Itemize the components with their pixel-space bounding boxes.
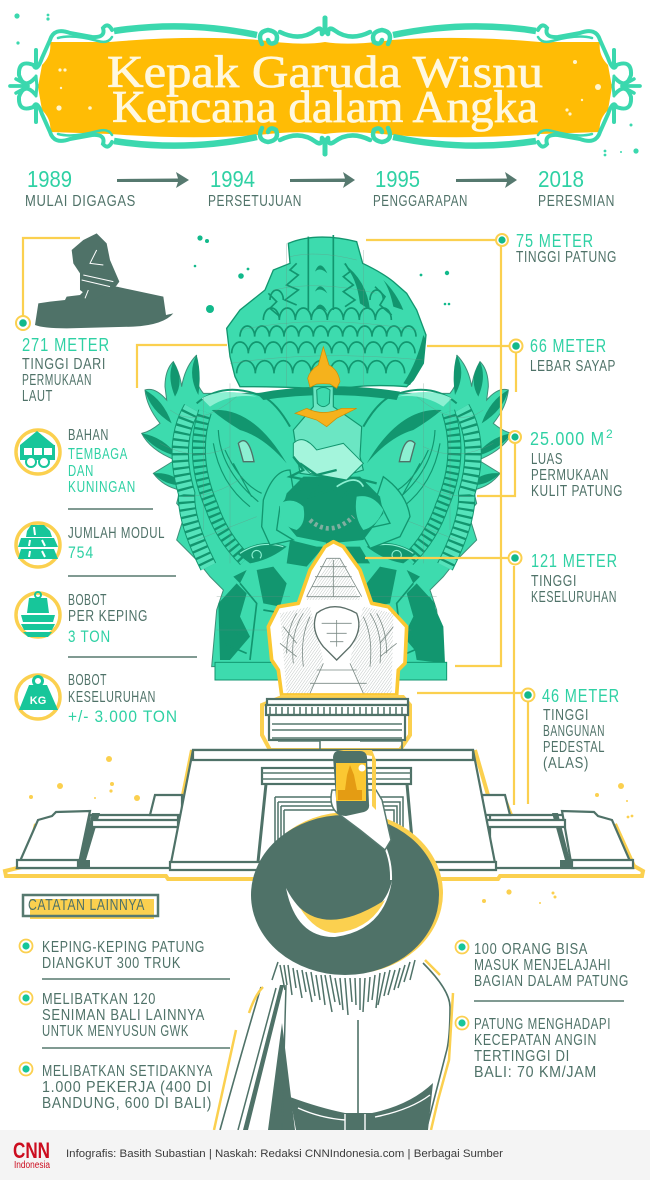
callout: 66 meter: 66 METER bbox=[530, 336, 607, 356]
stat: bahan: KUNINGAN bbox=[68, 479, 136, 496]
stat: bobot keseluruhan: +/- 3.000 TON bbox=[68, 707, 178, 726]
arrow 2 bbox=[290, 172, 355, 188]
CNN logo: Indonesia bbox=[14, 1160, 50, 1171]
divider bbox=[68, 575, 176, 577]
note: melibatkan 120 bbox=[20, 991, 205, 1040]
footer bbox=[0, 1130, 650, 1180]
banner frame ornament bbox=[10, 18, 640, 154]
hair bbox=[272, 960, 415, 1015]
callout: 46 meter bbox=[522, 686, 620, 772]
2018 milestone: PERESMIAN bbox=[538, 193, 615, 210]
marker bbox=[496, 234, 508, 246]
icon: KG weight bbox=[16, 675, 60, 719]
note: angin bbox=[456, 1016, 611, 1081]
1989 milestone: MULAI DIGAGAS bbox=[25, 193, 136, 210]
callout: 25.000 m2: 25.000 M bbox=[530, 429, 605, 449]
callout: 25.000 m2: LUAS bbox=[531, 451, 563, 468]
left wing bbox=[142, 355, 327, 667]
1994 milestone: 1994 bbox=[210, 166, 255, 192]
stat: bobot per keping: 3 TON bbox=[68, 627, 111, 646]
stat: bahan bbox=[16, 427, 136, 496]
note: 100 orang: 100 ORANG BISA bbox=[474, 941, 588, 958]
callout: 271 meter with island silhouette: LAUT bbox=[22, 388, 53, 405]
crown of feathers bbox=[227, 235, 426, 400]
note: melibatkan setidaknya: 1.000 PEKERJA (400 DI bbox=[42, 1079, 212, 1096]
divider bbox=[42, 1047, 230, 1049]
callout: 25.000 m2: PERMUKAAN bbox=[531, 467, 609, 484]
1995 milestone: PENGGARAPAN bbox=[373, 193, 468, 210]
CNN logo: CNN bbox=[13, 1138, 50, 1163]
callout: 75 meter: TINGGI PATUNG bbox=[516, 249, 617, 266]
callout: 46 meter: BANGUNAN bbox=[543, 723, 605, 740]
callout: 46 meter: 46 METER bbox=[542, 686, 620, 706]
bullet bbox=[20, 992, 32, 1004]
stat: bobot keseluruhan: BOBOT bbox=[68, 672, 107, 689]
pedestal main building bbox=[5, 750, 643, 879]
heading: catatan lainnya bbox=[23, 895, 158, 919]
callout: 25.000 m2 bbox=[509, 427, 623, 500]
CNN logo bbox=[13, 1138, 50, 1171]
callout: 75 meter: 75 METER bbox=[516, 231, 594, 251]
right wing bbox=[327, 355, 512, 667]
pedestal upper tier bbox=[262, 697, 410, 750]
wing feather row inner bbox=[199, 412, 245, 560]
bullet bbox=[456, 940, 468, 954]
yellow specks bbox=[29, 756, 633, 904]
callout: 121 meter: TINGGI bbox=[531, 573, 577, 590]
divider bbox=[68, 508, 153, 510]
note: melibatkan 120: MELIBATKAN 120 bbox=[42, 991, 156, 1008]
callout: 46 meter: (ALAS) bbox=[543, 755, 589, 772]
note: melibatkan setidaknya: BANDUNG, 600 DI BALI) bbox=[42, 1095, 212, 1112]
1989 milestone: 1989 bbox=[27, 166, 72, 192]
icon: KG weight: KG bbox=[30, 695, 46, 707]
note: keping-keping patung bbox=[20, 939, 205, 972]
banner orange panel bbox=[38, 38, 612, 137]
stat: jumlah modul bbox=[16, 523, 165, 567]
stat: bobot per keping: BOBOT bbox=[68, 592, 107, 609]
yellow shadow bbox=[5, 750, 643, 879]
dark tangle below Vishnu bbox=[290, 457, 377, 497]
icon: wagon bbox=[16, 430, 60, 474]
marker bbox=[522, 688, 534, 702]
timeline bbox=[25, 166, 615, 210]
divider bbox=[474, 1000, 624, 1002]
right wing block bbox=[490, 815, 575, 868]
title line 1: Kepak Garuda Wisnu bbox=[107, 47, 543, 97]
stat: bobot keseluruhan: KESELURUHAN bbox=[68, 689, 156, 706]
callout: 66 meter: LEBAR SAYAP bbox=[530, 358, 616, 375]
note: melibatkan 120: SENIMAN BALI LAINNYA bbox=[42, 1007, 205, 1024]
marker bbox=[508, 552, 522, 564]
note: melibatkan setidaknya: MELIBATKAN SETIDAKNYA bbox=[42, 1063, 213, 1080]
left wing block bbox=[80, 815, 178, 868]
bullet bbox=[20, 1062, 32, 1076]
marker bbox=[509, 431, 521, 443]
Vishnu figure bbox=[262, 347, 445, 663]
note: melibatkan setidaknya bbox=[20, 1062, 213, 1112]
1995 milestone bbox=[373, 166, 468, 210]
stat: bahan: TEMBAGA bbox=[68, 446, 128, 463]
divider bbox=[42, 978, 230, 980]
gold collar bbox=[295, 408, 357, 427]
stat: bahan: DAN bbox=[68, 463, 94, 480]
Garuda belly bbox=[280, 477, 383, 543]
credits: Infografis: Basith Subastian | Naskah: Redaksi CNNIndonesia.com | Berbagai Sumber bbox=[66, 1148, 503, 1160]
heading: catatan lainnya: CATATAN LAINNYA bbox=[28, 897, 145, 914]
callout: 75 meter bbox=[496, 231, 617, 266]
statue Garuda Wisnu Kencana bbox=[142, 235, 512, 695]
Vishnu body bbox=[293, 387, 363, 478]
note: angin: TERTINGGI DI bbox=[474, 1048, 570, 1065]
bullet bbox=[456, 1016, 468, 1030]
hat crescent bbox=[286, 880, 392, 937]
stat: bobot per keping bbox=[16, 592, 148, 646]
callout: 46 meter: PEDESTAL bbox=[543, 739, 605, 756]
note: keping-keping patung: DIANGKUT 300 TRUK bbox=[42, 955, 181, 972]
hat yellow edge bbox=[255, 812, 443, 974]
wing feather row outer bbox=[180, 408, 208, 567]
island silhouette bbox=[35, 233, 173, 328]
1989 milestone bbox=[25, 166, 136, 210]
body outline bbox=[220, 963, 450, 1130]
callout: 271 meter with island silhouette: PERMUKAAN bbox=[22, 372, 92, 389]
1994 milestone bbox=[208, 166, 302, 210]
title banner bbox=[10, 13, 640, 156]
teal specks near statue bbox=[194, 235, 450, 313]
note: keping-keping patung: KEPING-KEPING PATUNG bbox=[42, 939, 205, 956]
stat: bobot per keping: PER KEPING bbox=[68, 608, 148, 625]
callout: 271 meter with island silhouette bbox=[16, 233, 173, 405]
gold crown bbox=[308, 347, 340, 388]
bag strap bbox=[243, 985, 295, 1130]
divider bbox=[68, 656, 197, 658]
bullet bbox=[20, 940, 32, 952]
woman with hat bbox=[214, 750, 453, 1130]
small statue with yellow outline bbox=[268, 542, 407, 695]
1994 milestone: PERSETUJUAN bbox=[208, 193, 302, 210]
callout: 25.000 m2: 2 bbox=[606, 427, 613, 441]
callout: 121 meter bbox=[508, 551, 618, 606]
hand and phone bbox=[331, 750, 391, 850]
marker bbox=[510, 340, 522, 352]
callout: 271 meter with island silhouette: 271 METER bbox=[22, 335, 110, 355]
banner dots bbox=[56, 60, 601, 116]
frame specks bbox=[14, 13, 639, 156]
icon: stacked weight bbox=[16, 592, 60, 637]
lower body bbox=[287, 540, 370, 567]
arrow 3 bbox=[456, 172, 517, 188]
callout: 121 meter: 121 METER bbox=[531, 551, 618, 571]
stat: bobot keseluruhan bbox=[16, 672, 178, 726]
doorway bbox=[258, 768, 414, 862]
stat: jumlah modul: JUMLAH MODUL bbox=[68, 525, 165, 542]
marker bbox=[16, 316, 30, 330]
Garuda legs bbox=[262, 470, 410, 548]
callout: 66 meter bbox=[510, 336, 616, 375]
note: 100 orang bbox=[456, 940, 629, 990]
arrow 1 bbox=[117, 172, 189, 188]
skirt bbox=[290, 1083, 433, 1130]
hat bbox=[251, 815, 439, 975]
central block bbox=[170, 750, 496, 868]
stat: bahan: BAHAN bbox=[68, 427, 109, 444]
callout: 46 meter: TINGGI bbox=[543, 707, 589, 724]
icon: ingots bbox=[16, 523, 60, 567]
statue base bbox=[215, 662, 447, 680]
body yellow highlights bbox=[214, 960, 453, 1130]
note: angin: BALI: 70 KM/JAM bbox=[474, 1064, 597, 1081]
note: angin: KECEPATAN ANGIN bbox=[474, 1032, 597, 1049]
callout lines bbox=[23, 238, 528, 805]
title line 2: Kencana dalam Angka bbox=[112, 82, 538, 132]
2018 milestone: 2018 bbox=[538, 166, 584, 192]
body bbox=[215, 965, 450, 1130]
stat: jumlah modul: 754 bbox=[68, 543, 94, 562]
note: melibatkan 120: UNTUK MENYUSUN GWK bbox=[42, 1023, 189, 1040]
1995 milestone: 1995 bbox=[375, 166, 420, 192]
2018 milestone bbox=[538, 166, 615, 210]
callout: 271 meter with island silhouette: TINGGI DARI bbox=[22, 356, 106, 373]
